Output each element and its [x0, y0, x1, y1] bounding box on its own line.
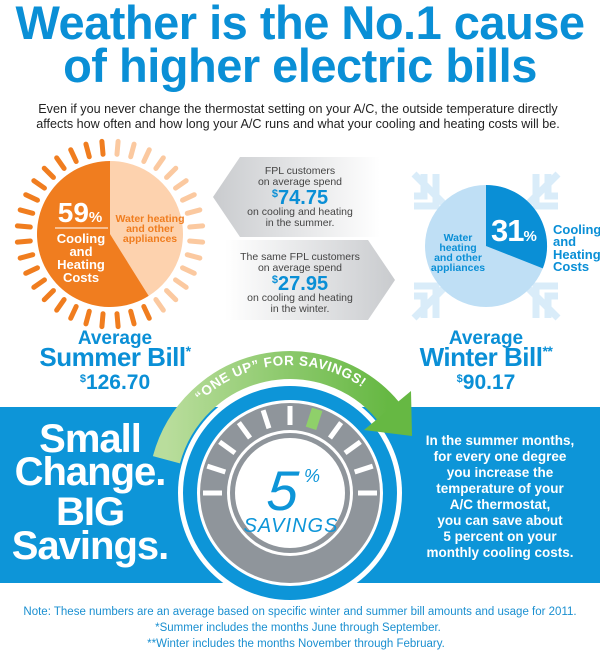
label: 59% cooling and heating: Heating — [57, 257, 105, 272]
heading: average winter bill: $ — [457, 373, 463, 385]
heading: small change big savings — [12, 417, 168, 568]
label: 31%: 31% — [491, 213, 536, 248]
arrow: summer spend callout: on average spend — [258, 176, 342, 188]
label: water heating winter: Water — [444, 232, 472, 244]
label: 59% cooling and heating: Costs — [63, 270, 99, 285]
label: 59% cooling and heating: 59% — [58, 197, 102, 228]
arrow: winter spend callout: 27.95 — [278, 273, 328, 295]
text block: summer months tip: you can save about — [437, 513, 563, 528]
text block: summer months tip: temperature of your — [436, 481, 565, 496]
arrow: winter spend callout: The same FPL customers — [240, 251, 360, 263]
label: cooling and heating costs winter: Heating — [553, 247, 600, 262]
icon: thermostat dial — [178, 381, 402, 605]
heading: average summer bill: $ — [80, 373, 86, 385]
text block: summer months tip: In the summer months, — [426, 433, 574, 448]
text block: notes: Note: These numbers are an average based on specific winter and summer bill amounts and usage for 2011. — [23, 606, 577, 618]
label: 5% savings — [244, 459, 338, 537]
title — [15, 0, 585, 92]
label: water heating winter: heating — [439, 242, 477, 254]
label: cooling and heating costs winter: Cooling — [553, 222, 600, 237]
subtitle: Even if you never change the thermostat setting on your A/C, the outside temperature directly — [38, 102, 558, 116]
label: water heating winter: and other — [434, 252, 482, 264]
panel: blue band — [0, 407, 600, 583]
subtitle — [36, 102, 560, 131]
heading: average winter bill: Winter Bill — [420, 342, 542, 372]
title: of higher electric bills — [63, 39, 537, 92]
text block: notes: **Winter includes the months November through February. — [147, 638, 445, 650]
arrow: summer spend callout: on cooling and heating — [247, 206, 353, 218]
text block: notes: *Summer includes the months June through September. — [155, 622, 441, 634]
heading: small change big savings: Small — [39, 417, 141, 461]
label: water heating winter: appliances — [431, 262, 485, 274]
text block: notes — [23, 606, 577, 650]
label: 59% cooling and heating: Cooling — [57, 231, 105, 246]
arrow: winter spend callout: $ — [272, 274, 278, 286]
text block: summer months tip: monthly cooling costs. — [426, 545, 574, 560]
label: 5% savings: % — [304, 466, 320, 486]
heading: small change big savings: BIG — [56, 490, 124, 534]
arrow: summer spend callout — [213, 157, 380, 237]
text block: summer months tip: 5 percent on your — [443, 529, 557, 544]
text block: summer months tip: for every one degree — [434, 449, 567, 464]
arrow: summer spend callout: $ — [272, 188, 278, 200]
arrow: winter spend callout — [225, 240, 395, 320]
heading: average winter bill — [420, 328, 553, 394]
text block: summer months tip: A/C thermostat, — [450, 497, 550, 512]
label: water heating summer — [115, 213, 185, 245]
label: cooling and heating costs winter: Costs — [553, 259, 589, 274]
arrow: winter spend callout: on average spend — [258, 262, 342, 274]
label: water heating summer: Water heating — [115, 213, 185, 225]
label: cooling and heating costs winter: and — [553, 234, 576, 249]
arrow: one up for savings — [152, 351, 412, 464]
subtitle: affects how often and how long your A/C runs and what your cooling and heating costs will be. — [36, 117, 560, 131]
label: cooling and heating costs winter — [553, 222, 600, 274]
text block: summer months tip: you increase the — [447, 465, 554, 480]
arrow: summer spend callout: FPL customers — [265, 165, 335, 177]
heading: average summer bill: Summer Bill — [39, 342, 186, 372]
heading: average summer bill: * — [186, 343, 192, 359]
heading: small change big savings: Savings. — [12, 524, 168, 568]
heading: small change big savings: Change. — [15, 450, 165, 494]
heading: average winter bill: ** — [542, 343, 553, 359]
panel: summer sun pie — [17, 141, 203, 327]
arrow: summer spend callout: in the summer. — [266, 217, 334, 229]
heading: average winter bill: 90.17 — [463, 371, 515, 394]
label: 5% savings: 5 — [265, 459, 301, 522]
arrow: winter spend callout: in the winter. — [271, 303, 329, 315]
heading: average summer bill — [39, 328, 192, 394]
arrow: one up for savings: “ONE UP” FOR SAVINGS! — [195, 356, 366, 397]
label: water heating winter — [431, 232, 485, 274]
heading: average winter bill: Average — [449, 328, 523, 349]
heading: average summer bill: Average — [78, 328, 152, 349]
heading: average summer bill: 126.70 — [86, 371, 150, 394]
label: water heating summer: and other — [126, 223, 174, 235]
label: water heating summer: appliances — [123, 233, 177, 245]
panel: winter snowflake pie — [414, 174, 600, 318]
text block: summer months tip — [426, 433, 574, 560]
label: 5% savings: SAVINGS — [244, 515, 338, 537]
arrow: winter spend callout: on cooling and heating — [247, 292, 353, 304]
arrow: summer spend callout: 74.75 — [278, 187, 328, 209]
label: 59% cooling and heating: and — [69, 244, 93, 259]
label: 59% cooling and heating — [55, 197, 108, 285]
